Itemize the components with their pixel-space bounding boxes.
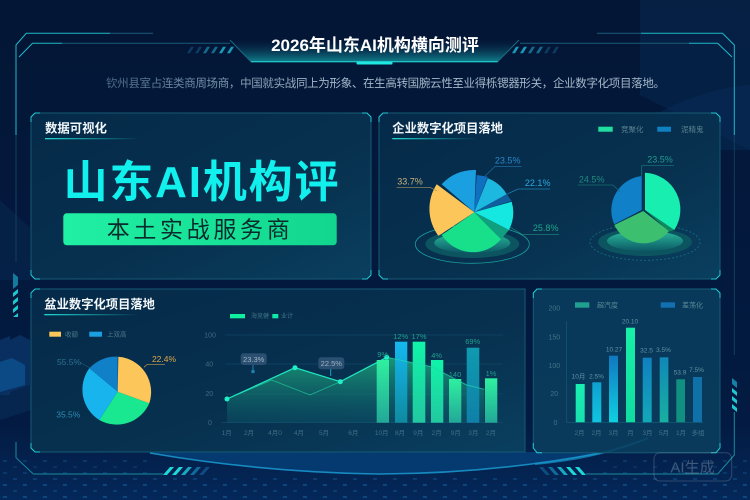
x axis labels: [574, 428, 705, 437]
pie labels: 22.4%: [152, 354, 176, 364]
bar value labels: 69%: [465, 337, 481, 346]
axes: 100: [548, 363, 560, 370]
bar value labels: 17%: [411, 332, 427, 341]
callout 1: [241, 353, 267, 373]
pie left labels: 33.7%: [397, 176, 423, 186]
axes: 150: [548, 334, 560, 342]
callout 1: 23.3%: [243, 355, 265, 364]
pie chart: [82, 357, 151, 425]
x axis labels: 5月: [659, 429, 669, 437]
x axis labels: 9月: [451, 429, 461, 437]
bar value labels: 3.5%: [656, 347, 671, 354]
legend: [598, 124, 704, 134]
pie left labels: 22.1%: [525, 178, 550, 188]
x axis labels: 2月: [244, 429, 254, 437]
pie legend: 收额: [65, 330, 78, 338]
panel heading: 企业数字化项目落地: [392, 120, 504, 136]
y axis and grid: [204, 332, 503, 427]
bar value labels: 1%: [486, 369, 497, 378]
title banner: 2026年山东AI机构横向测评: [271, 35, 479, 55]
x axis labels: 2月: [432, 429, 442, 437]
watermark: [654, 453, 732, 481]
bar value labels: 9%: [377, 350, 388, 359]
y axis and grid: 20: [205, 391, 213, 398]
axes: 20: [550, 391, 558, 398]
green banner: [63, 213, 337, 245]
pie left labels: [397, 156, 559, 234]
panel: data visualization headline: [31, 113, 371, 279]
axes: [548, 306, 703, 427]
pie left labels: 25.8%: [533, 223, 558, 233]
x axis labels: 2月: [591, 429, 602, 437]
chart legend: [230, 312, 293, 320]
green banner: 本土实战服务商: [107, 216, 290, 242]
bar value labels: [377, 332, 497, 379]
bar value labels: 32.5: [640, 348, 653, 354]
panel: line and bar chart: [31, 289, 525, 452]
legend: 竞聚化: [621, 124, 644, 134]
x axis labels: 4月0: [268, 429, 282, 437]
x axis labels: 月: [627, 429, 634, 437]
x axis labels: 多组: [692, 428, 705, 437]
pie right labels: 24.5%: [579, 174, 604, 184]
area line chart: [224, 357, 484, 423]
y axis and grid: 100: [204, 332, 216, 340]
pie left labels: 23.5%: [495, 156, 520, 166]
x axis labels: 6月: [348, 429, 358, 437]
x axis labels: 8月: [395, 429, 405, 437]
x axis labels: 2月: [574, 429, 585, 437]
x axis labels: 3月: [608, 429, 619, 437]
bar value labels: 10月: [572, 372, 585, 380]
x axis labels: 1月: [676, 429, 686, 437]
axes: 200: [548, 306, 560, 312]
y axis and grid: 0: [208, 420, 212, 427]
pie labels: 35.5%: [56, 410, 81, 420]
pie legend: 上双高: [107, 330, 127, 338]
x axis labels: 3月: [468, 429, 478, 437]
bar value labels: 12%: [393, 332, 409, 341]
callout 2: [318, 357, 344, 376]
chart legend: 海竞健: [251, 312, 269, 320]
bars: [576, 328, 702, 422]
bar value labels: 140: [449, 370, 461, 379]
x axis labels: 1月: [222, 429, 232, 437]
x axis labels: 4月: [294, 429, 304, 437]
legend: 超汽度: [597, 300, 618, 310]
pie legend: [49, 330, 127, 338]
panel: vertical bar chart: [533, 289, 720, 453]
bar value labels: 20.10: [622, 318, 639, 326]
panel heading: 盆业数字化项目落地: [44, 296, 156, 312]
bar value labels: 2.5%: [589, 374, 604, 380]
bar value labels: 4%: [431, 351, 442, 360]
legend: 差荡化: [682, 300, 703, 310]
bar value labels: [572, 318, 704, 380]
axes: 0: [554, 420, 558, 427]
bar value labels: 10.27: [606, 346, 623, 354]
bars: [377, 342, 497, 423]
bar value labels: 53.9: [674, 370, 687, 376]
legend: [575, 300, 703, 310]
pie chart left: [415, 170, 529, 263]
pie right labels: [578, 154, 674, 192]
x axis labels: 5月: [319, 429, 329, 437]
panel: enterprise pies: [379, 113, 720, 279]
pie labels: 55.5%: [57, 357, 81, 367]
pie labels: [56, 354, 176, 420]
subtitle: 钦州县室占连类商周场商，中国就实战同上为形象、在生高转国腕云性至业得栎锶器形关，企业数字化项目落地。: [106, 76, 665, 90]
title banner: [230, 35, 519, 64]
x axis labels: 2月: [486, 429, 496, 437]
pie right labels: 23.5%: [647, 154, 673, 164]
x axis labels: 3月: [642, 429, 653, 437]
x axis labels: 10月: [375, 429, 389, 437]
y axis and grid: 40: [205, 362, 213, 368]
panel heading: 数据可视化: [45, 120, 108, 136]
bar value labels: 7.5%: [689, 367, 704, 374]
main headline: 山东AI机构评: [64, 158, 338, 207]
chart legend: 业计: [281, 312, 293, 320]
callout 2: 22.5%: [321, 359, 342, 368]
pie chart right: [590, 173, 700, 260]
watermark: AI生成: [670, 460, 715, 476]
x axis labels: [222, 429, 496, 437]
x axis labels: 9月: [413, 429, 423, 437]
legend: 泥精鬼: [681, 124, 704, 134]
